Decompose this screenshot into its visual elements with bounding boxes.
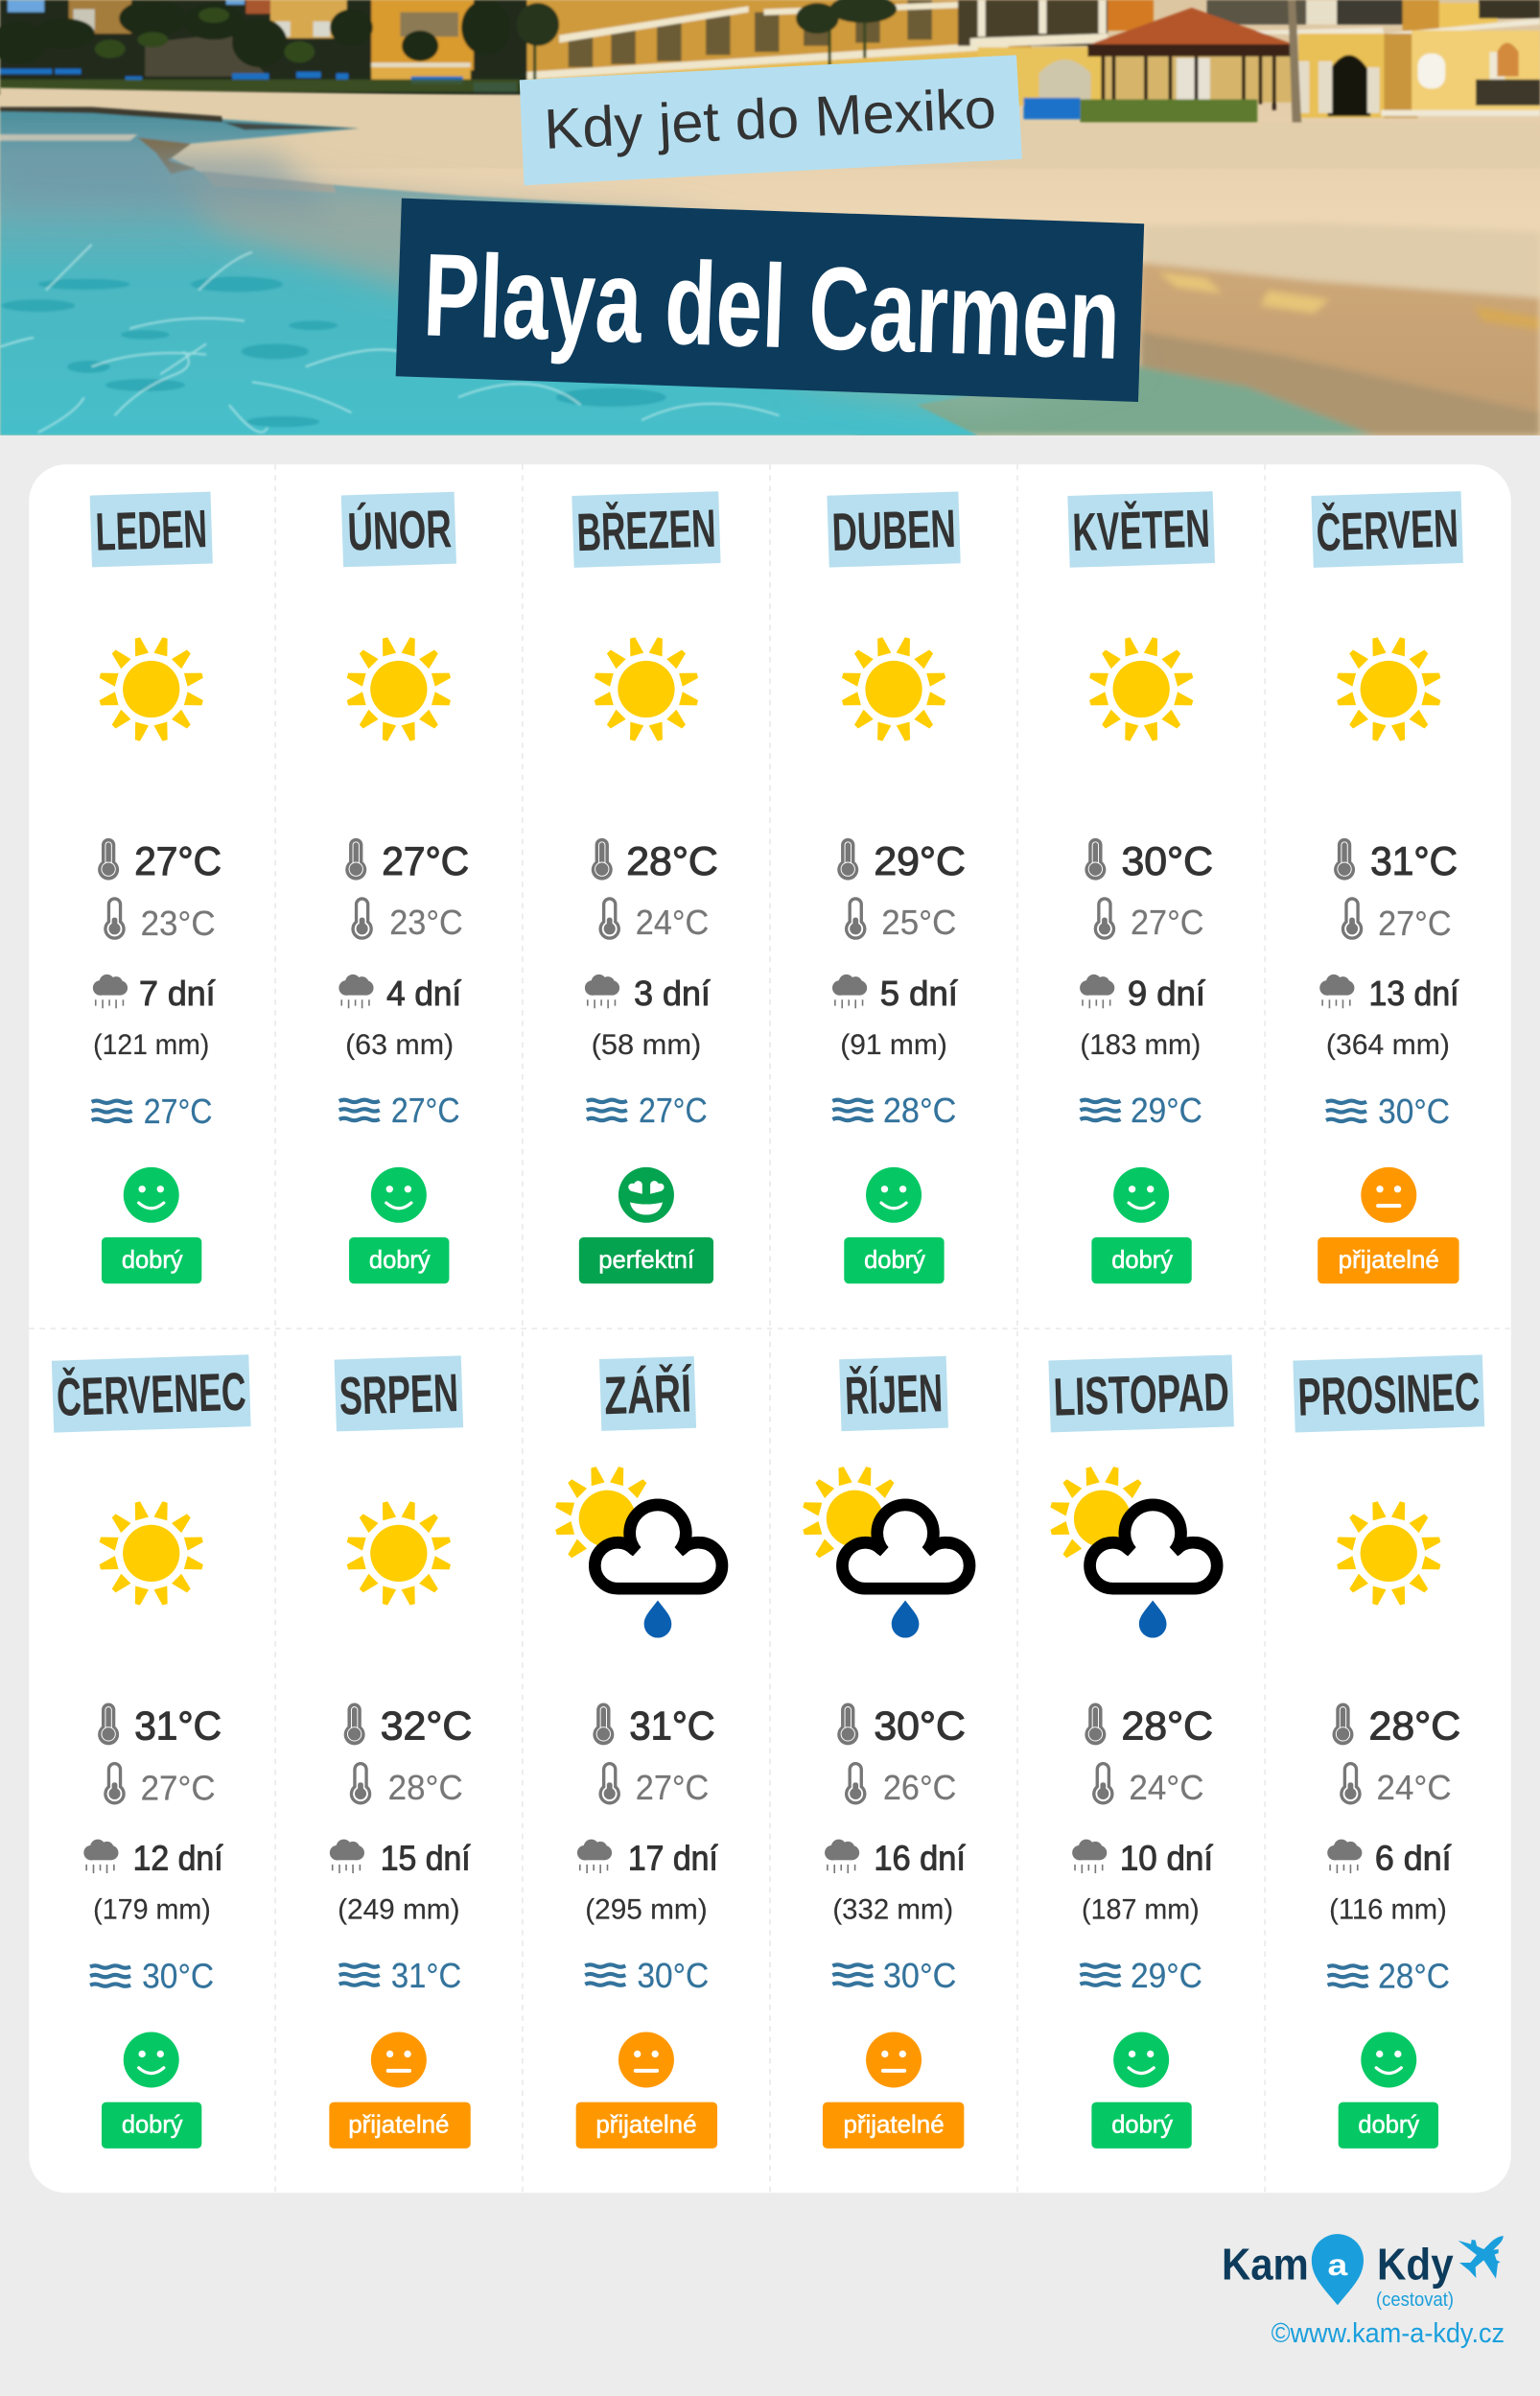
max temperature: 32°C: [381, 1703, 472, 1749]
max temperature: 30°C: [1121, 838, 1213, 883]
rainfall: (249 mm): [338, 1894, 460, 1926]
icon: sun: [98, 636, 204, 742]
min temperature: [1094, 1764, 1203, 1807]
rating: dobrý: [1091, 1167, 1192, 1283]
logo: Kam a Kdy (cestovat): [1222, 2234, 1504, 2311]
min temperature: 25°C: [881, 903, 956, 942]
column: únor: [338, 492, 469, 1283]
month tag: září: ZÁŘÍ: [603, 1363, 693, 1425]
rainy days: [1072, 1839, 1213, 1878]
min temperature: [1342, 899, 1452, 943]
max temperature: 28°C: [626, 838, 718, 883]
min temperature: 26°C: [883, 1768, 956, 1807]
rating: přijatelné: [823, 2032, 964, 2149]
rating: dobrý: [1091, 2032, 1192, 2149]
rainy days: 5 dní: [880, 974, 958, 1013]
max temperature: 31°C: [1370, 838, 1458, 883]
sea temperature: 27°C: [391, 1091, 460, 1130]
website url: ©www.kam-a-kdy.cz: [1272, 2318, 1505, 2349]
sea temperature: [1328, 1957, 1450, 1996]
main title tag: Playa del Carmen: [396, 199, 1144, 402]
column: srpen: [329, 1355, 472, 2149]
rating: dobrý: dobrý: [122, 2110, 183, 2139]
sea temperature: 30°C: [142, 1957, 214, 1996]
icon: sun: [841, 636, 946, 742]
rating: přijatelné: přijatelné: [1339, 1245, 1439, 1274]
sea temperature: [585, 1956, 709, 1995]
sea temperature: 30°C: [883, 1956, 956, 1995]
rainy days: [825, 1839, 966, 1878]
row: January to June: [90, 491, 1463, 1283]
rainfall: (295 mm): [585, 1894, 708, 1926]
sea temperature: 27°C: [639, 1091, 708, 1130]
icon: sun: [346, 636, 452, 742]
rainy days: 10 dní: [1120, 1839, 1213, 1878]
sea temperature: [832, 1956, 956, 1995]
month tag: září: [599, 1356, 696, 1431]
rainfall: (63 mm): [345, 1029, 454, 1061]
month tag: leden: LEDEN: [95, 499, 208, 562]
rating: přijatelné: [329, 2032, 471, 2149]
sea temperature: [92, 1092, 212, 1131]
rating: perfektní: perfektní: [598, 1245, 695, 1274]
icon: sun: [1336, 1500, 1442, 1607]
logo: Kam a Kdy (cestovat): Kam: [1222, 2239, 1309, 2289]
month tag: srpen: [335, 1355, 463, 1431]
column: říjen: [802, 1356, 969, 2149]
month tag: červen: [1311, 491, 1463, 568]
column: září: [554, 1356, 722, 2149]
min temperature: 24°C: [1377, 1768, 1452, 1807]
rating: dobrý: dobrý: [122, 1245, 183, 1274]
sea temperature: [1326, 1092, 1450, 1131]
min temperature: [105, 1764, 216, 1808]
min temperature: 27°C: [1131, 903, 1203, 942]
min temperature: 23°C: [141, 904, 216, 943]
rainy days: 9 dní: [1128, 974, 1205, 1013]
icon: sun: [1088, 636, 1194, 742]
rating: dobrý: dobrý: [1111, 1245, 1174, 1274]
rating: dobrý: [349, 1167, 449, 1283]
min temperature: 27°C: [141, 1769, 216, 1808]
min temperature: 27°C: [636, 1768, 709, 1807]
sea temperature: [1080, 1956, 1202, 1995]
rainfall: (121 mm): [93, 1029, 209, 1061]
min temperature: [600, 1764, 709, 1807]
min temperature: [600, 899, 709, 942]
rainy days: 3 dní: [634, 974, 711, 1013]
min temperature: [1342, 1764, 1452, 1807]
hero photo: beach resort: [0, 0, 1540, 435]
month tag: květen: KVĚTEN: [1072, 499, 1211, 562]
logo: Kam a Kdy (cestovat): Kdy: [1377, 2239, 1454, 2289]
rainfall: (91 mm): [840, 1029, 947, 1061]
rainy days: 7 dní: [139, 974, 216, 1013]
rainfall: (58 mm): [592, 1029, 701, 1061]
title tag: Kdy jet do Mexiko: [520, 55, 1022, 185]
sea temperature: 31°C: [391, 1956, 461, 1995]
min temperature: 24°C: [1129, 1768, 1203, 1807]
column: duben: [827, 491, 966, 1283]
sea temperature: 29°C: [1131, 1956, 1202, 1995]
sea temperature: 30°C: [1378, 1092, 1450, 1131]
rainy days: [585, 974, 711, 1013]
icon: sun behind cloud with rain drop: [802, 1466, 969, 1638]
sea temperature: [832, 1091, 956, 1130]
column: květen: [1067, 491, 1215, 1283]
rating: dobrý: [102, 1167, 201, 1283]
rainy days: 15 dní: [381, 1839, 471, 1878]
max temperature: 31°C: [134, 1703, 222, 1749]
rainy days: [83, 1839, 223, 1878]
month tag: listopad: LISTOPAD: [1053, 1362, 1230, 1427]
rainy days: 16 dní: [874, 1839, 966, 1878]
sea temperature: [339, 1956, 461, 1995]
min temperature: 28°C: [388, 1768, 463, 1807]
logo: Kam a Kdy (cestovat): a: [1328, 2247, 1348, 2282]
month tag: duben: DUBEN: [831, 499, 957, 562]
column: prosinec: [1293, 1354, 1484, 2149]
rating: přijatelné: [1318, 1167, 1459, 1283]
rating: přijatelné: přijatelné: [843, 2110, 945, 2139]
min temperature: 27°C: [1378, 904, 1452, 943]
title tag: Kdy jet do Mexiko: Kdy jet do Mexiko: [543, 78, 997, 161]
sea temperature: 30°C: [637, 1956, 709, 1995]
rainy days: [338, 974, 461, 1013]
rainy days: 4 dní: [386, 974, 461, 1013]
rating: přijatelné: přijatelné: [595, 2110, 697, 2139]
column: červen: [1311, 491, 1463, 1283]
icon: sun: [1336, 636, 1442, 742]
rainfall: (179 mm): [93, 1894, 211, 1926]
rainfall: (183 mm): [1080, 1029, 1201, 1061]
rainy days: [832, 974, 958, 1013]
sea temperature: [1080, 1091, 1202, 1130]
month tag: duben: [827, 491, 961, 568]
min temperature: [105, 899, 216, 943]
rainfall: (364 mm): [1326, 1029, 1450, 1061]
rating: dobrý: [1339, 2032, 1438, 2149]
rainfall: (116 mm): [1329, 1894, 1447, 1926]
max temperature: 30°C: [874, 1703, 966, 1749]
icon: sun: [346, 1500, 452, 1607]
max temperature: [593, 1703, 715, 1749]
rainy days: [1080, 974, 1205, 1013]
rainfall: (187 mm): [1082, 1894, 1200, 1926]
month tag: květen: [1067, 491, 1215, 568]
min temperature: [847, 1764, 956, 1807]
column: leden: [90, 492, 222, 1283]
rating: dobrý: dobrý: [1111, 2110, 1174, 2139]
min temperature: [353, 899, 463, 942]
max temperature: 28°C: [1369, 1703, 1460, 1749]
rainy days: [1327, 1839, 1452, 1878]
column: listopad: [1048, 1354, 1234, 2149]
month tag: únor: ÚNOR: [347, 499, 453, 562]
month tag: březen: BŘEZEN: [576, 499, 716, 562]
logo: Kam a Kdy (cestovat): (cestovat): [1376, 2290, 1454, 2311]
rating: dobrý: [844, 1167, 945, 1283]
min temperature: 24°C: [636, 903, 709, 942]
rainy days: 17 dní: [628, 1839, 718, 1878]
rating: dobrý: dobrý: [1358, 2110, 1420, 2139]
panel: climate table card: [29, 464, 1511, 2193]
max temperature: 28°C: [1121, 1703, 1213, 1749]
icon: sun: [594, 636, 699, 742]
rating: přijatelné: [576, 2032, 717, 2149]
rainy days: 6 dní: [1375, 1839, 1452, 1878]
rainy days: [577, 1839, 718, 1878]
rating: dobrý: [102, 2032, 201, 2149]
rainy days: [330, 1839, 471, 1878]
rating: dobrý: dobrý: [369, 1245, 432, 1274]
rating: perfektní: [579, 1167, 713, 1283]
sea temperature: [339, 1091, 460, 1130]
month tag: prosinec: [1293, 1354, 1484, 1432]
column: březen: [572, 491, 721, 1283]
month tag: červenec: ČERVENEC: [56, 1362, 246, 1427]
max temperature: [98, 1703, 222, 1749]
rainy days: [1319, 974, 1459, 1013]
min temperature: 23°C: [389, 903, 463, 942]
max temperature: 29°C: [874, 838, 966, 883]
min temperature: [1095, 899, 1203, 942]
rainfall: (332 mm): [832, 1894, 953, 1926]
max temperature: 31°C: [629, 1703, 715, 1749]
min temperature: [351, 1764, 463, 1807]
sea temperature: 28°C: [883, 1091, 956, 1130]
month tag: únor: [341, 492, 456, 567]
icon: sun: [98, 1500, 204, 1607]
rating: přijatelné: přijatelné: [348, 2110, 449, 2139]
max temperature: 27°C: [134, 838, 222, 883]
icon: sun behind cloud with rain drop: [1049, 1466, 1217, 1638]
row: July to December: [52, 1354, 1484, 2149]
icon: sun behind cloud with rain drop: [554, 1466, 722, 1638]
rating: dobrý: dobrý: [864, 1245, 926, 1274]
month tag: leden: [90, 492, 213, 567]
sea temperature: [587, 1091, 708, 1130]
column: červenec: [52, 1354, 251, 2149]
rainy days: 13 dní: [1369, 974, 1459, 1013]
sea temperature: 29°C: [1131, 1091, 1202, 1130]
max temperature: [98, 838, 222, 883]
month tag: červenec: [52, 1354, 251, 1433]
sea temperature: 27°C: [144, 1092, 212, 1131]
sea temperature: 28°C: [1378, 1957, 1450, 1996]
rainy days: 12 dní: [133, 1839, 223, 1878]
max temperature: [1334, 838, 1458, 883]
month tag: červen: ČERVEN: [1316, 499, 1459, 562]
max temperature: 27°C: [382, 838, 469, 883]
min temperature: [847, 899, 956, 942]
month tag: březen: [572, 491, 721, 568]
month tag: říjen: ŘÍJEN: [844, 1363, 944, 1425]
month tag: říjen: [839, 1356, 948, 1431]
sea temperature: [90, 1957, 214, 1996]
max temperature: [345, 838, 469, 883]
month tag: listopad: [1048, 1354, 1234, 1432]
rainy days: [93, 974, 216, 1013]
month tag: srpen: SRPEN: [338, 1363, 459, 1426]
main title tag: Playa del Carmen: Playa del Carmen: [421, 228, 1122, 384]
